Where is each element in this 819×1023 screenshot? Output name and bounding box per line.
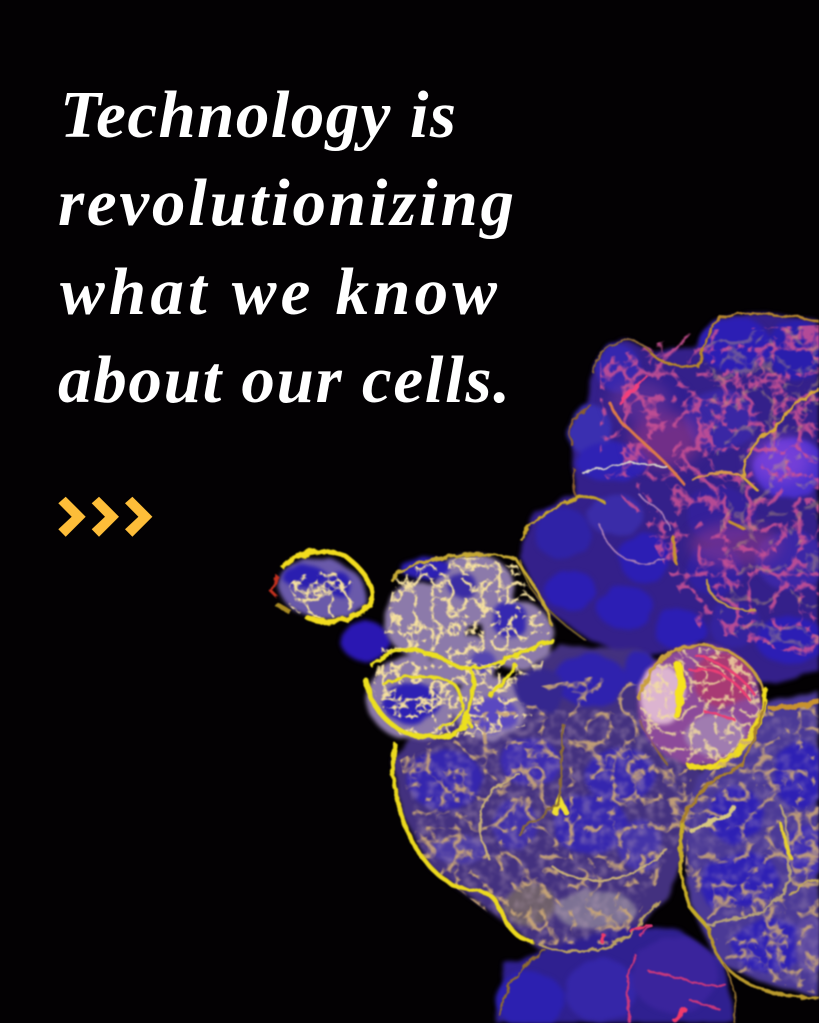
photo: fluorescent cell cluster [270, 312, 819, 1023]
right cluster filament texture [685, 700, 819, 995]
cell: dark blue blob [341, 621, 389, 661]
glow: magenta haze in upper cluster [610, 380, 810, 567]
cream filament texture [372, 556, 550, 738]
lower cluster nuclei [407, 652, 678, 930]
right cluster nuclei [701, 741, 819, 973]
cell outlines: upper cluster membranes [520, 314, 819, 640]
right cluster mottling [690, 710, 819, 990]
heading line 4: about our cells. [58, 343, 510, 417]
nuclei: upper right blue cells [534, 317, 819, 664]
right cluster membranes [680, 702, 819, 998]
texture: tan speckle in upper cluster [700, 325, 819, 660]
cell group: bottom cluster [496, 925, 736, 1023]
heading [58, 78, 514, 417]
heading line 1: Technology is [60, 78, 456, 152]
cream cells nuclei [382, 557, 528, 733]
cell group: right lower cluster [680, 700, 819, 998]
bottom cluster nuclei [496, 937, 719, 1023]
texture: magenta cytoskeleton in upper cluster [600, 325, 819, 660]
icon: three yellow chevrons [58, 497, 152, 537]
cell: small yellow-rimmed cell on the left [270, 552, 372, 626]
cell group: lower centre cluster [393, 652, 695, 952]
bottom cluster filaments [500, 925, 736, 1023]
heading line 2: revolutionizing [58, 166, 514, 240]
lower cluster mottling [405, 710, 690, 945]
cell: bright pink and yellow cell [638, 645, 765, 768]
cell group: bright cream cells [366, 554, 553, 740]
cream cells base [367, 554, 553, 740]
silhouette: cell cluster base colour [392, 312, 819, 1023]
yellow membranes [366, 555, 552, 737]
lower cluster membranes [393, 720, 668, 952]
lower cluster filament texture [400, 660, 695, 945]
heading line 3: what we know [60, 255, 497, 329]
